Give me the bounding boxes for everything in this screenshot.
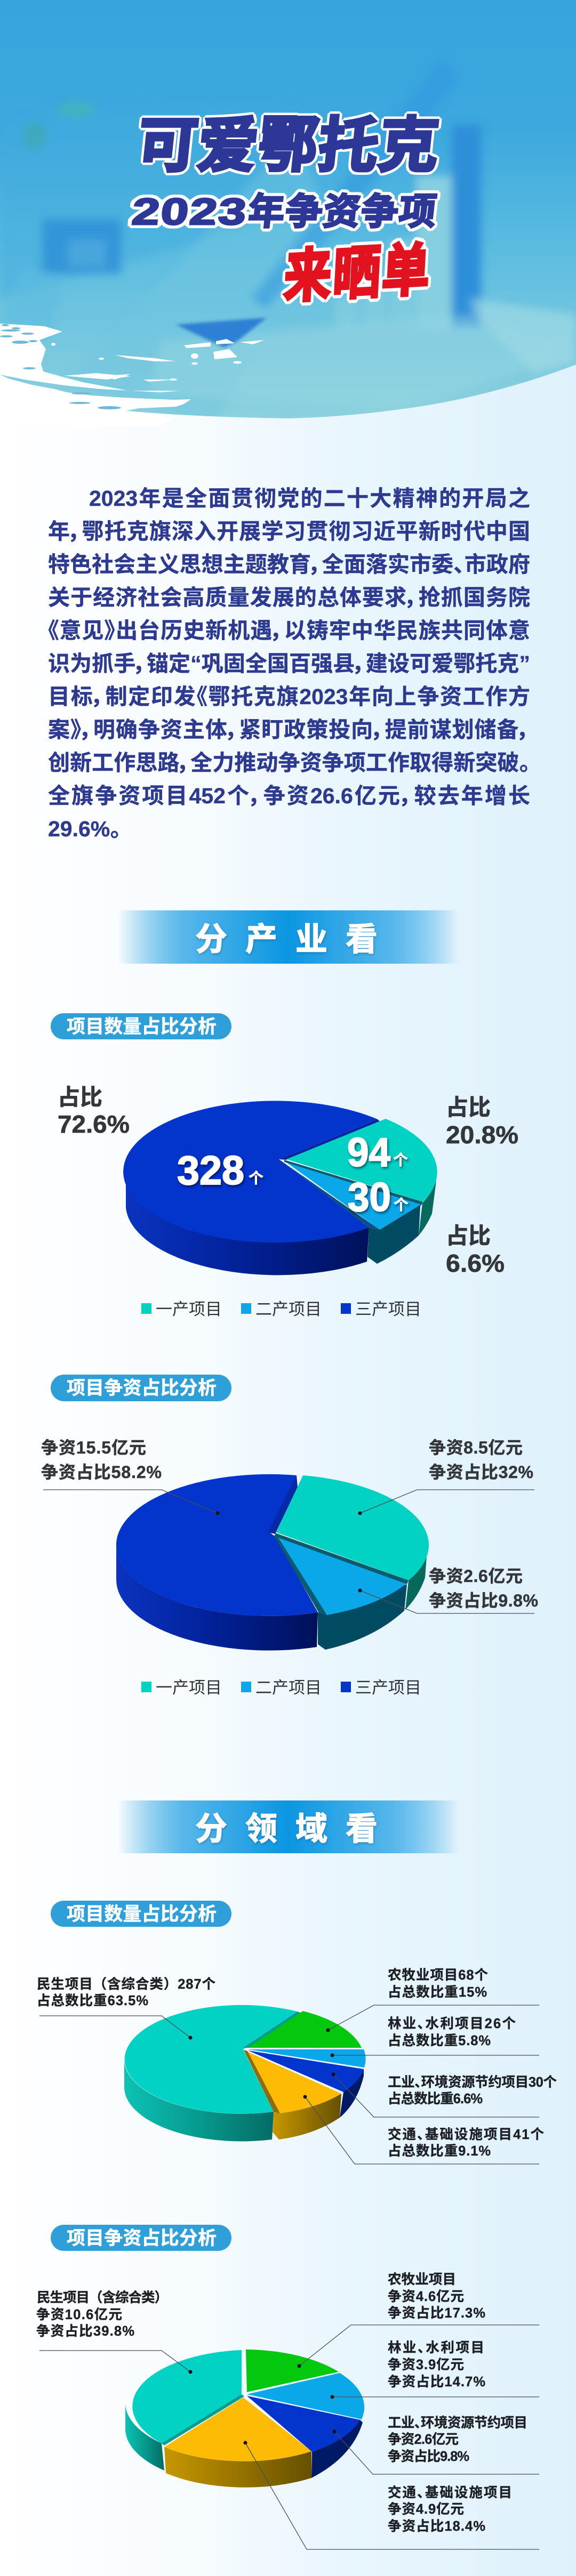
- title: 2023年争资争项: 3: [217, 191, 249, 232]
- callout: 农牧业项目68个: 占总数比重15%: [388, 1985, 487, 2000]
- value label: 328个: 个: [249, 1170, 263, 1186]
- legend: industry funding: 一产项目: [156, 1678, 222, 1697]
- sub heading: 项目争资占比分析 (sector): 项目争资占比分析: [67, 2228, 217, 2249]
- callout: 民生项目 287个: [37, 1977, 215, 2039]
- label: share 20.8%: 20.8%: [446, 1121, 518, 1149]
- value label: 30个: 个: [394, 1197, 409, 1213]
- intro paragraph: 案》，明确争资主体，紧盯政策投向，提前谋划储备，: [48, 717, 530, 742]
- callout: 争资15.5亿元: 争资15.5亿元: [41, 1438, 146, 1457]
- sub heading: 项目数量占比分析 (sector): 项目数量占比分析: [67, 1904, 217, 1925]
- callout: 争资15.5亿元: 争资占比58.2%: [41, 1463, 162, 1482]
- value label: 30个: 30: [348, 1175, 391, 1220]
- label: share 6.6%: 6.6%: [446, 1249, 505, 1277]
- callout: 民生项目 287个: 占总数比重63.5%: [37, 1993, 148, 2008]
- title: 2023年争资争项: 0: [159, 191, 191, 232]
- callout: 林业、水利项目 3.9亿元: 争资占比14.7%: [388, 2375, 485, 2389]
- callout: 农牧业项目 4.6亿元: 争资4.6亿元: [388, 2289, 464, 2304]
- legend: industry count: 一产项目: [156, 1300, 222, 1319]
- intro paragraph: 全旗争资项目452个，争资26.6亿元，较去年增长: [48, 784, 530, 808]
- intro paragraph: 29.6%。: [48, 817, 121, 841]
- sub heading: 项目数量占比分析 (industry): [51, 1013, 231, 1039]
- title: 来晒单: 来晒单: [282, 238, 433, 310]
- callout: 林业、水利项目 3.9亿元: [331, 2340, 539, 2399]
- intro paragraph: 年，鄂托克旗深入开展学习贯彻习近平新时代中国: [48, 519, 530, 544]
- callout: 工业、环境资源节约项目30个: 工业、环境资源节约项目30个: [388, 2075, 557, 2090]
- sub heading: 项目争资占比分析 (industry): [51, 1375, 231, 1401]
- intro paragraph: [48, 486, 530, 841]
- callout: 争资2.6亿元: 争资2.6亿元: [429, 1566, 523, 1586]
- legend: industry funding: [141, 1678, 421, 1697]
- callout: 农牧业项目 4.6亿元: 争资占比17.3%: [388, 2306, 485, 2321]
- pie chart: project count by industry: [123, 1101, 437, 1275]
- intro paragraph: 《意见》出台历史新机遇，以铸牢中华民族共同体意: [48, 618, 530, 643]
- sub heading: 项目争资占比分析 (sector): [51, 2225, 231, 2251]
- label: share 72.6%: [58, 1085, 130, 1138]
- label: share 20.8%: [446, 1095, 518, 1149]
- hero background image: [0, 0, 576, 418]
- value label: 94个: 个: [393, 1152, 408, 1168]
- callout: 农牧业项目68个: 农牧业项目68个: [388, 1968, 488, 1983]
- label: share 6.6%: 占比: [446, 1223, 491, 1248]
- legend: industry count: 三产项目: [355, 1300, 421, 1319]
- label: share 20.8%: 占比: [446, 1095, 491, 1120]
- value label: 94个: 94: [347, 1130, 390, 1175]
- callout: 争资8.5亿元: 争资占比32%: [429, 1463, 533, 1482]
- callout: 交通、基础设施项目 4.9亿元: 交通、基础设施项目: [388, 2485, 512, 2500]
- callout: 工业、环境资源节约项目 2.6亿元: 争资2.6亿元: [388, 2432, 459, 2447]
- section heading: 分领域看: 分领域看: [195, 1811, 396, 1847]
- intro paragraph: 识为抓手，锚定“巩固全国百强县，建设可爱鄂托克”: [48, 651, 530, 676]
- callout: 工业、环境资源节约项目 2.6亿元: [333, 2416, 539, 2474]
- label: share 72.6%: 72.6%: [58, 1110, 130, 1138]
- intro paragraph: 创新工作思路，全力推动争资争项工作取得新突破。: [48, 750, 530, 775]
- callout: 民生项目 10.6亿元: 民生项目（含综合类）: [37, 2290, 168, 2305]
- callout: 林业、水利项目26个: 占总数比重5.8%: [388, 2033, 491, 2048]
- callout: 民生项目 10.6亿元: [36, 2290, 192, 2374]
- callout: 工业、环境资源节约项目30个: [332, 2072, 557, 2117]
- callout: 交通、基础设施项目 4.9亿元: [243, 2441, 539, 2549]
- callout: 交通、基础设施项目41个: [303, 2095, 544, 2164]
- title: 2023年争资争项: 2: [188, 191, 220, 232]
- label: share 72.6%: 占比: [58, 1085, 102, 1110]
- pie chart: funding by industry: [116, 1474, 429, 1651]
- callout: 林业、水利项目 3.9亿元: 林业、水利项目: [388, 2340, 484, 2355]
- legend: industry count: [141, 1300, 421, 1319]
- pie chart: project count by sector: [124, 2005, 366, 2141]
- callout: 争资8.5亿元: 争资8.5亿元: [429, 1438, 523, 1457]
- callout: 民生项目 10.6亿元: 争资10.6亿元: [36, 2307, 122, 2322]
- callout: 林业、水利项目26个: [331, 2016, 539, 2057]
- intro paragraph: 2023年是全面贯彻党的二十大精神的开局之: [89, 486, 530, 511]
- section heading: 分领域看: [117, 1800, 459, 1853]
- legend: industry funding: 二产项目: [255, 1678, 322, 1697]
- callout: 交通、基础设施项目41个: 交通、基础设施项目41个: [388, 2127, 544, 2142]
- callout: 民生项目 287个: 民生项目（含综合类）287个: [37, 1977, 215, 1992]
- callout: 工业、环境资源节约项目 2.6亿元: 争资占比9.8%: [388, 2449, 469, 2464]
- callout: 民生项目 10.6亿元: 争资占比39.8%: [36, 2324, 134, 2339]
- callout: 林业、水利项目 3.9亿元: 争资3.9亿元: [388, 2357, 464, 2372]
- intro paragraph: 特色社会主义思想主题教育，全面落实市委、市政府: [48, 552, 530, 577]
- sub heading: 项目争资占比分析 (industry): 项目争资占比分析: [67, 1378, 217, 1399]
- legend: industry funding: 三产项目: [355, 1678, 421, 1697]
- callout: 工业、环境资源节约项目30个: 占总数比重6.6%: [388, 2092, 483, 2106]
- callout: 农牧业项目 4.6亿元: 农牧业项目: [388, 2272, 456, 2287]
- sub heading: 项目数量占比分析 (sector): [51, 1901, 231, 1927]
- callout: 交通、基础设施项目 4.9亿元: 争资占比18.4%: [388, 2519, 485, 2534]
- legend: industry count: 二产项目: [255, 1300, 322, 1319]
- title: 可爱鄂托克: 可爱鄂托克: [134, 112, 443, 179]
- title: 2023年争资争项: 年争资争项: [245, 191, 439, 232]
- sub heading: 项目数量占比分析 (industry): 项目数量占比分析: [67, 1016, 217, 1037]
- callout: 争资2.6亿元: 争资占比9.8%: [429, 1591, 538, 1610]
- callout: 农牧业项目68个: [326, 1968, 539, 2032]
- callout: 林业、水利项目26个: 林业、水利项目26个: [388, 2016, 516, 2031]
- title: 2023年争资争项: [127, 189, 441, 232]
- intro paragraph: 目标，制定印发《鄂托克旗2023年向上争资工作方: [48, 684, 530, 709]
- intro paragraph: 关于经济社会高质量发展的总体要求，抢抓国务院: [48, 585, 530, 610]
- pie chart: funding by sector: [125, 2349, 364, 2488]
- callout: 争资2.6亿元: [358, 1566, 538, 1613]
- callout: 农牧业项目 4.6亿元: [298, 2272, 539, 2368]
- value label: 328个: 328: [177, 1148, 244, 1193]
- callout: 交通、基础设施项目 4.9亿元: 争资4.9亿元: [388, 2502, 464, 2517]
- callout: 争资8.5亿元: [358, 1438, 534, 1515]
- callout: 交通、基础设施项目41个: 占总数比重9.1%: [388, 2144, 491, 2159]
- label: share 6.6%: [446, 1223, 505, 1277]
- section heading: 分产业看: 分产业看: [195, 922, 396, 957]
- title: 2023年争资争项: 2: [130, 191, 163, 232]
- callout: 工业、环境资源节约项目 2.6亿元: 工业、环境资源节约项目: [388, 2416, 527, 2430]
- callout: 争资15.5亿元: [41, 1438, 220, 1515]
- section heading: 分产业看: [117, 910, 459, 964]
